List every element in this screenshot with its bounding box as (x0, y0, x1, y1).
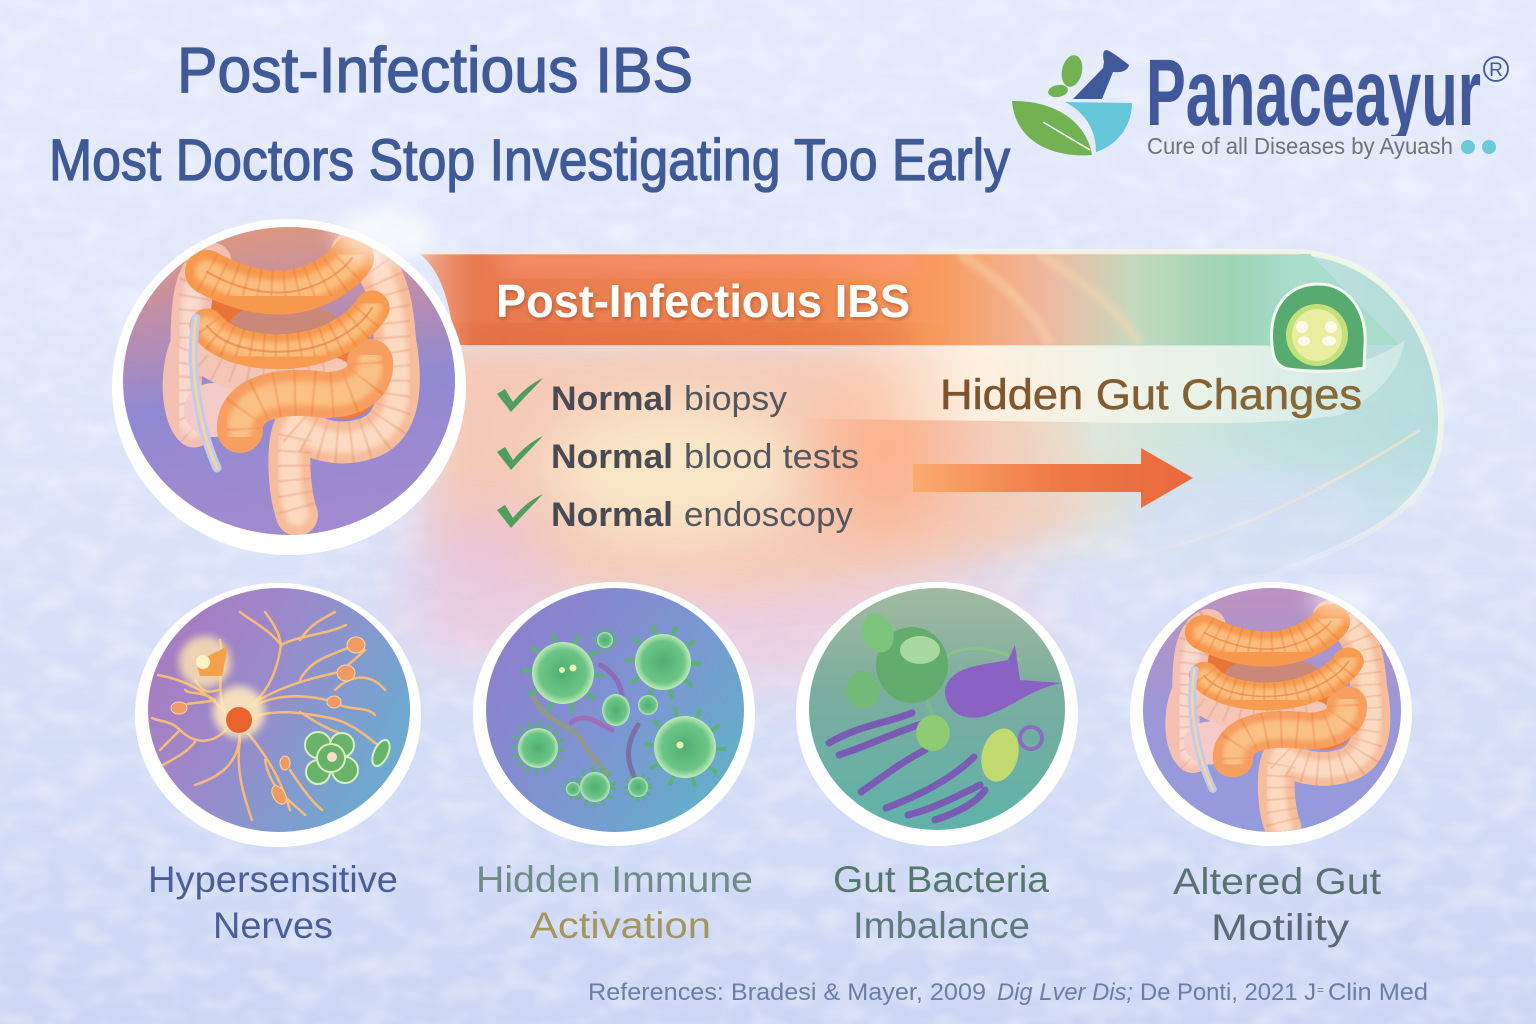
label: Gut Bacteria Imbalance: Imbalance (853, 905, 1030, 946)
label: Altered Gut Motility: Altered Gut (1173, 861, 1382, 902)
check item: endoscopy (497, 494, 853, 534)
label: Altered Gut Motility: Motility (1211, 907, 1350, 948)
band top edge (420, 252, 1300, 254)
check item: biopsy: Normal (551, 380, 673, 418)
label: Gut Bacteria Imbalance (833, 859, 1049, 946)
label: Hidden Immune Activation (476, 859, 753, 946)
band shading (478, 254, 1144, 345)
label: Gut Bacteria Imbalance: Gut Bacteria (833, 859, 1049, 900)
banner heading: Post-Infectious IBS (496, 275, 910, 327)
teal end of the pill (950, 252, 1441, 600)
orange header band (420, 254, 1400, 345)
check item: blood tests: Normal (551, 438, 673, 476)
label: Altered Gut Motility (1173, 861, 1382, 948)
label: Hidden Immune Activation: Activation (530, 905, 711, 946)
references (588, 979, 1428, 1006)
title: Most Doctors Stop Investigating Too Early (49, 128, 1010, 193)
tagline: Cure of all Diseases by Ayuash (1147, 133, 1453, 159)
title (49, 34, 1010, 193)
icon: gut bacteria circle (796, 582, 1078, 846)
icon: hypersensitive nerves circle (135, 583, 421, 847)
check item: biopsy (497, 378, 787, 418)
checklist (497, 378, 859, 534)
check item: biopsy: biopsy (684, 380, 787, 418)
label: Hidden Immune Activation: Hidden Immune (476, 859, 753, 900)
ribbon (455, 340, 1405, 423)
icon: green capsule button (1272, 284, 1365, 371)
check item: blood tests: blood tests (684, 438, 859, 476)
icon: mortar, pestle and leaf (1012, 50, 1132, 155)
arrow (913, 448, 1193, 508)
references: = (1317, 983, 1324, 997)
registered mark: R (1489, 60, 1503, 81)
check item: endoscopy: endoscopy (684, 496, 853, 534)
label: Hypersensitive Nerves: Hypersensitive (148, 859, 398, 900)
icon: large intestine circle (112, 207, 466, 555)
peach body wash (410, 340, 1130, 610)
logo: Panaceayur (1012, 40, 1508, 159)
references: Dig Lver Dis; (997, 979, 1133, 1006)
check item: endoscopy: Normal (551, 496, 673, 534)
references: De Ponti, 2021 J (1140, 979, 1316, 1006)
check item: blood tests (497, 436, 859, 476)
icon: immune activation circle (473, 582, 755, 846)
references: Clin Med (1328, 979, 1428, 1006)
label: Hypersensitive Nerves: Nerves (213, 905, 333, 946)
icon: altered gut motility circle (1130, 582, 1412, 846)
heading: Hidden Gut Changes: Hidden Gut Changes (940, 371, 1362, 419)
title: Post-Infectious IBS (177, 34, 693, 106)
references: References: Bradesi & Mayer, 2009 (588, 979, 986, 1006)
registered mark (1484, 57, 1508, 81)
panel: Post-Infectious IBS banner (410, 250, 1441, 610)
tagline dots (1461, 140, 1496, 154)
label: Hypersensitive Nerves (148, 859, 398, 946)
